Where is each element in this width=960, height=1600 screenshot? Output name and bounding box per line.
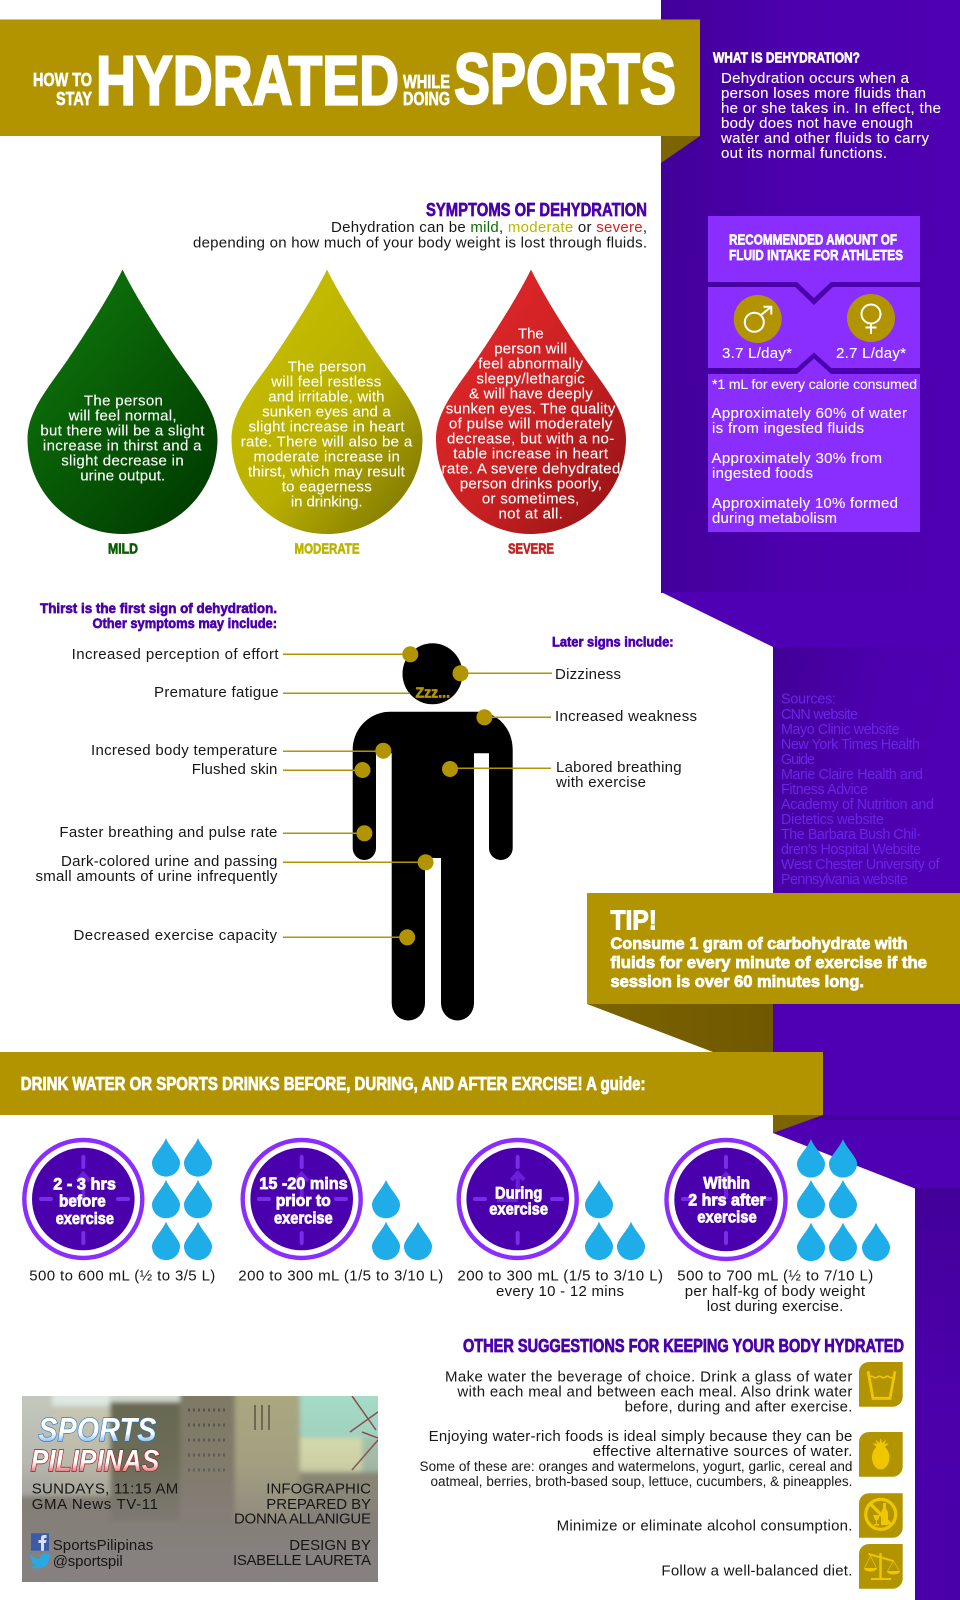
label: mild: MILD [108, 542, 138, 558]
text block: what is dehydration: body does not have enough [721, 115, 913, 132]
drop: mild [28, 270, 218, 534]
drop: severe: sunken eyes. The quality [446, 400, 616, 418]
title banner: HYDRATED [96, 42, 399, 120]
text block: first signs heading: Thirst is the first sign of dehydration. [40, 600, 277, 616]
panel: sports pilipinas credits: GMA News TV-11 [32, 1496, 158, 1513]
panel: recommended fluid intake: 3.7 L/day* [722, 345, 792, 362]
suggestion: balanced diet: Follow a well-balanced diet. [661, 1563, 852, 1580]
drop: moderate: to eagerness [282, 478, 372, 496]
panel: recommended fluid intake: Approximately 60% of water [712, 405, 907, 422]
drop: mild: The person [84, 392, 163, 410]
panel: sports pilipinas credits: DONNA ALLANIGUE [234, 1511, 371, 1528]
drop: severe: not at all. [498, 506, 563, 522]
text block: later signs heading: Later signs include: [552, 634, 674, 650]
panel: recommended fluid intake: is from ingested fluids [712, 420, 864, 437]
text block: what is dehydration: out its normal functions. [721, 145, 887, 162]
text block: sources: West Chester University of [781, 857, 940, 873]
text block: what is dehydration: Dehydration occurs when a [721, 70, 910, 87]
text block: sources: Academy of Nutrition and [781, 797, 934, 813]
guide step: 15-20 mins prior: prior to [276, 1191, 331, 1210]
guide step: during exercise: exercise [489, 1199, 548, 1218]
caption: 200 to 300 mL every 10-12 mins: every 10 - 12 mins [496, 1283, 624, 1300]
text block: what is dehydration: WHAT IS DEHYDRATION? [713, 50, 860, 66]
guide step: during exercise: During [495, 1183, 542, 1202]
suggestion: alcohol: Minimize or eliminate alcohol consumption. [557, 1518, 852, 1535]
symptom labels left: Decreased exercise capacity [74, 927, 278, 944]
guide step: within 2 hrs after: Within [703, 1173, 750, 1192]
drop: moderate: The person [288, 358, 366, 376]
drop: mild: slight decrease in [61, 452, 184, 470]
guide step: 15-20 mins prior [243, 1140, 361, 1258]
caption: 500 to 600 mL: 500 to 600 mL (½ to 3/5 L) [29, 1268, 215, 1285]
panel: sports pilipinas credits: SUNDAYS, 11:15 AM [32, 1481, 178, 1498]
drop: moderate: and irritable, with [268, 388, 384, 406]
guide step: 2-3 hrs before exercise: exercise [56, 1209, 114, 1228]
drop: severe: rate. A severe dehydrated [442, 460, 620, 478]
symptom labels left: Incresed body temperature [91, 742, 277, 759]
drop: severe: sleepy/lethargic [476, 370, 585, 388]
guide step: during exercise [459, 1140, 577, 1258]
caption: 500 to 700 mL per half-kg: per half-kg of body weight [685, 1283, 866, 1300]
guide step: 2-3 hrs before exercise: 2 - 3 hrs [53, 1174, 116, 1193]
callout: tip [587, 893, 960, 1052]
guide step: within 2 hrs after [666, 1140, 786, 1259]
text block: what is dehydration [713, 50, 941, 162]
logo: sports pilipinas [31, 1411, 160, 1478]
heading: symptoms of dehydration [193, 200, 647, 252]
panel: sports pilipinas credits: PREPARED BY [266, 1496, 371, 1513]
body silhouette [353, 643, 513, 1020]
text block: what is dehydration: he or she takes in. In effect, the [721, 100, 941, 117]
drop: moderate: in drinking. [291, 494, 363, 510]
icon: pineapple [859, 1432, 903, 1477]
symptom labels left: Increased perception of effort [72, 646, 279, 663]
symptom labels left: Faster breathing and pulse rate [59, 824, 277, 841]
caption: 500 to 700 mL per half-kg: 500 to 700 mL (½ to 7/10 L) [677, 1268, 873, 1285]
panel: recommended fluid intake: Approximately 10% formed [712, 495, 898, 512]
banner: drink water guide [0, 1052, 823, 1133]
drop: severe: person will [494, 340, 567, 358]
icon: twitter [30, 1553, 51, 1568]
drop: severe: of pulse will moderately [449, 416, 613, 432]
panel: recommended fluid intake: during metabolism [712, 510, 837, 527]
text block: sources: Fitness Advice [781, 782, 868, 798]
icon: facebook [31, 1533, 49, 1551]
text block: what is dehydration: water and other fluids to carry [720, 130, 930, 147]
zzz fatigue mark: Zzz... [416, 686, 450, 702]
drop: severe: feel abnormally [478, 356, 584, 372]
icon group: three water drops [372, 1180, 432, 1260]
panel: recommended fluid intake: RECOMMENDED AMOUNT OF [729, 233, 897, 249]
callout: tip: fluids for every minute of exercise if the [610, 953, 927, 972]
text block: sources: The Barbara Bush Chil- [781, 827, 921, 843]
symptom labels right [555, 666, 697, 791]
text block: sources: dren's Hospital Website [781, 842, 921, 858]
drop: severe: decrease, but with a no- [447, 430, 614, 448]
panel: lower purple side panel [773, 1115, 960, 1600]
icon: no alcohol [859, 1493, 903, 1538]
caption: 200 to 300 mL every 10-12 mins: 200 to 300 mL (1/5 to 3/10 L) [457, 1268, 663, 1285]
caption: 200 to 300 mL every 10-12 mins [457, 1268, 663, 1300]
text block: sources: Mayo Clinic website [781, 722, 900, 738]
suggestion: water-rich foods: oatmeal, berries, broth-based soup, lettuce, cucumbers, & pineapples. [430, 1474, 852, 1489]
banner: drink water guide: DRINK WATER OR SPORTS DRINKS BEFORE, DURING, AND AFTER EXRCISE! A guide: [21, 1074, 646, 1094]
drop: moderate: moderate increase in [254, 448, 400, 466]
symptom labels right: with exercise [555, 774, 646, 791]
drop: severe [436, 270, 626, 534]
symptom markers [354, 646, 492, 945]
symptom labels left: small amounts of urine infrequently [36, 868, 278, 885]
caption: 500 to 700 mL per half-kg: lost during exercise. [707, 1298, 843, 1315]
panel: recommended fluid intake: FLUID INTAKE FOR ATHLETES [729, 248, 903, 264]
heading: symptoms of dehydration: SYMPTOMS OF DEHYDRATION [426, 200, 647, 220]
panel: sports pilipinas credits: DESIGN BY [289, 1537, 371, 1554]
icon group: seven water drops [797, 1139, 890, 1261]
label: moderate: MODERATE [294, 542, 360, 558]
icon: male symbol [734, 295, 782, 343]
callout: tip: Consume 1 gram of carbohydrate with [610, 934, 908, 953]
suggestion: water-rich foods [420, 1428, 852, 1489]
symptom labels left [36, 646, 279, 944]
panel: sports pilipinas credits [22, 1396, 378, 1582]
symptom labels left: Premature fatigue [154, 684, 279, 701]
panel: upper purple side panel [661, 0, 960, 1116]
text block: sources [781, 692, 940, 888]
suggestion: water-rich foods: Some of these are: oranges and watermelons, yogurt, garlic, cereal and [420, 1459, 852, 1474]
text block: first signs heading [40, 600, 277, 631]
human figure diagram [36, 643, 697, 1020]
icon: balance scale [859, 1544, 903, 1589]
suggestion: water beverage [445, 1369, 852, 1415]
text block: sources: New York Times Health [781, 737, 920, 753]
caption: 500 to 700 mL per half-kg [677, 1268, 873, 1315]
logo: sports pilipinas: PILIPINAS [31, 1443, 160, 1478]
text block: what is dehydration: person loses more fluids than [721, 85, 926, 102]
caption: 200 to 300 mL: 200 to 300 mL (1/5 to 3/10 L) [238, 1268, 443, 1285]
drop: mild: will feel normal, [68, 408, 177, 424]
callout: tip: TIP! [610, 904, 657, 935]
label: severe: SEVERE [508, 542, 554, 558]
title banner: STAY [56, 89, 92, 109]
text block: sources: Guide [781, 752, 815, 768]
drop: severe: & will have deeply [469, 386, 593, 402]
heading: symptoms of dehydration: Dehydration can be mild, moderate or severe, [331, 219, 647, 236]
guide step: 15-20 mins prior: exercise [274, 1208, 333, 1228]
suggestion: water beverage: with each meal and between each meal. Also drink water [456, 1384, 852, 1401]
drop: mild: urine output. [80, 468, 165, 484]
suggestion: water-rich foods: effective alternative sources of water. [593, 1443, 852, 1460]
drop: severe: table increase in heart [453, 446, 609, 462]
icon: female symbol [847, 294, 895, 342]
text block: sources: Marie Claire Health and [781, 767, 923, 783]
suggestion: water beverage: Make water the beverage of choice. Drink a glass of water [445, 1369, 852, 1386]
drop: moderate: sunken eyes and a [262, 404, 391, 420]
icon: glass of water [859, 1362, 903, 1407]
guide step: 15-20 mins prior: 15 -20 mins [259, 1174, 348, 1193]
panel: sports pilipinas credits: SportsPilipinas [53, 1537, 153, 1554]
suggestion: water-rich foods: Enjoying water-rich foods is ideal simply because they can be [429, 1428, 852, 1445]
drop: moderate: slight increase in heart [249, 418, 405, 436]
logo: sports pilipinas: SPORTS [38, 1411, 156, 1448]
drop: mild: increase in thirst and a [43, 438, 202, 454]
panel: recommended fluid intake: *1 mL for every calorie consumed [712, 376, 917, 392]
panel: recommended fluid intake: 2.7 L/day* [836, 345, 906, 362]
drop: moderate [232, 270, 422, 534]
title banner [0, 20, 700, 163]
callout: tip: session is over 60 minutes long. [610, 972, 864, 991]
title banner: SPORTS [454, 40, 676, 120]
symptom labels left: Dark-colored urine and passing [61, 853, 277, 870]
panel: sports pilipinas credits: ISABELLE LAURETA [233, 1552, 371, 1569]
drop: moderate: thirst, which may result [248, 464, 406, 480]
symptom labels right: Increased weakness [555, 708, 697, 725]
city background [22, 1396, 378, 1582]
text block: first signs heading: Other symptoms may include: [92, 615, 277, 631]
drop: severe: or sometimes, [482, 490, 579, 508]
title banner: HOW TO [33, 70, 92, 90]
suggestion: water beverage: before, during and after exercise. [625, 1398, 852, 1415]
drop: moderate: will feel restless [270, 374, 381, 390]
panel: recommended fluid intake: ingested foods [712, 465, 813, 482]
drop: mild: but there will be a slight [40, 422, 205, 440]
drop: severe: The [518, 326, 544, 342]
symptom labels right: Dizziness [555, 666, 621, 683]
symptom labels right: Labored breathing [556, 759, 682, 776]
heading: symptoms of dehydration: depending on how much of your body weight is lost through fluids. [193, 234, 647, 252]
text block: sources: Pennsylvania website [781, 872, 908, 888]
guide step: within 2 hrs after: exercise [697, 1208, 757, 1227]
title banner: DOING [403, 89, 450, 109]
panel: sports pilipinas credits: INFOGRAPHIC [266, 1481, 371, 1498]
panel: sports pilipinas credits: @sportspil [53, 1553, 123, 1570]
drop: severe: person drinks poorly, [460, 476, 602, 492]
text block: sources: CNN website [781, 707, 858, 723]
icon group: three water drops [585, 1180, 645, 1260]
symptom labels left: Flushed skin [192, 761, 277, 778]
panel: recommended fluid intake: Approximately 30% from [712, 450, 882, 467]
guide step: within 2 hrs after: 2 hrs after [688, 1190, 766, 1209]
text block: sources: Dietetics website [781, 812, 884, 828]
guide step: 2-3 hrs before exercise [24, 1140, 142, 1258]
leader lines [283, 654, 552, 937]
icon group: six water drops [152, 1138, 212, 1260]
text block: sources: Sources: [781, 692, 836, 708]
drop: moderate: rate. There will also be a [241, 434, 413, 450]
title banner: WHILE [403, 72, 450, 92]
guide step: 2-3 hrs before exercise: before [59, 1192, 106, 1211]
panel: recommended fluid intake [708, 216, 920, 532]
